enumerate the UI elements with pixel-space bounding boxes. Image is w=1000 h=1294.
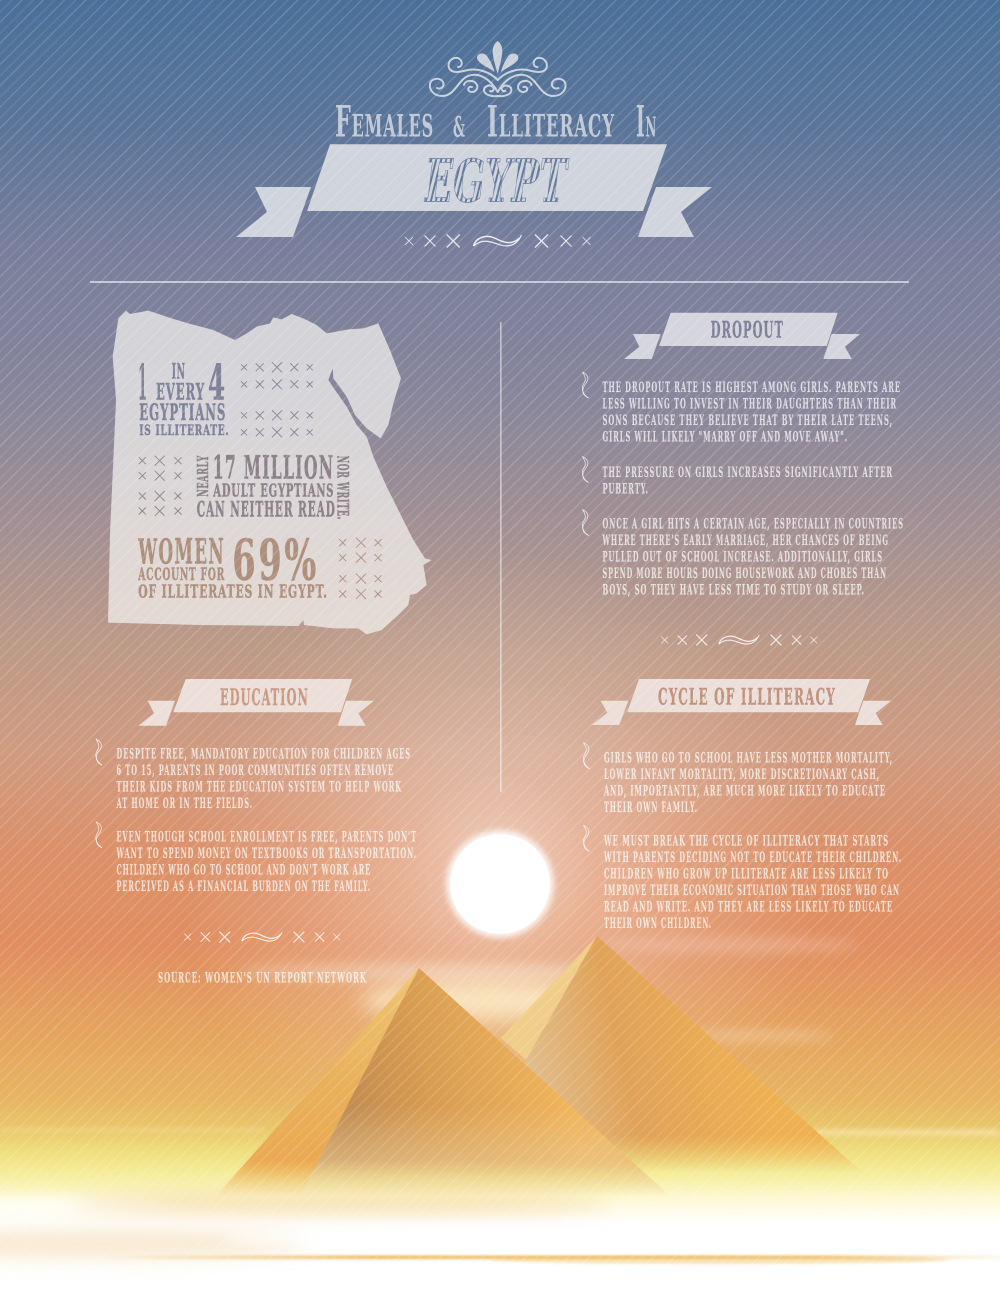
text: education body: CHILDREN WHO GO TO SCHOOL AND DON'T WORK ARE (116, 862, 371, 878)
infographic canvas: EVEN THOUGH SCHOOL ENROLLMENT IS FREE, PARENTS DON'T (116, 830, 417, 846)
header ornament (430, 41, 566, 96)
stat: nearly 17 million (194, 448, 352, 522)
foreground sand and mist (0, 1191, 1000, 1264)
text: dropout body (602, 380, 904, 598)
bullet icons (582, 372, 588, 536)
ribbon: Dropout (624, 313, 860, 359)
panel: Cycle of illiteracy (583, 679, 902, 932)
stat: nearly 17 million: NEARLY (194, 455, 212, 497)
title: Females & Illiteracy In: FEMALES (335, 98, 434, 148)
map of Egypt (108, 311, 432, 634)
stat: 1 in every 4: EGYPTIANS (139, 400, 226, 426)
panel: Education (96, 679, 417, 986)
haze clouds behind pyramids (0, 937, 1000, 1136)
text: education body: PERCEIVED AS A FINANCIAL BURDEN ON THE FAMILY. (116, 879, 371, 895)
bullet icons (96, 739, 102, 848)
decorative cross grids (139, 362, 382, 599)
ribbon: Cycle of illiteracy: CYCLE OF ILLITERACY (658, 684, 836, 710)
horizontal rule (90, 281, 909, 283)
title: Females & Illiteracy In (335, 98, 657, 148)
stat: 1 in every 4: IN (172, 358, 186, 383)
stat: 1 in every 4: 4 (208, 353, 227, 411)
panel: Egypt map statistics (108, 311, 432, 634)
title ribbon: Egypt: EGYPT (424, 146, 570, 216)
title: Females & Illiteracy In: & (453, 110, 465, 144)
stat: nearly 17 million: ADULT EGYPTIANS (213, 481, 334, 502)
text: education body: AT HOME OR IN THE FIELDS. (116, 796, 253, 812)
stat: nearly 17 million: CAN NEITHER READ (197, 497, 336, 522)
infographic canvas: WANT TO SPEND MONEY ON TEXTBOOKS OR TRANSPORTATION. (116, 846, 417, 862)
divider: dropout (661, 635, 817, 645)
panel: Dropout (582, 313, 904, 645)
stat: women 69%: WOMEN (138, 531, 225, 572)
ribbon: Cycle of illiteracy (592, 679, 891, 725)
vertical rule (500, 322, 502, 792)
ribbon: Dropout: DROPOUT (711, 318, 784, 344)
source note: SOURCE: WOMEN'S UN REPORT NETWORK (158, 970, 367, 986)
stat: women 69%: ACCOUNT FOR (138, 564, 225, 584)
divider: education (184, 932, 340, 942)
divider: title (405, 234, 590, 248)
stat: nearly 17 million: NOR WRITE. (334, 456, 352, 520)
stat: 1 in every 4: IS ILLITERATE. (139, 423, 229, 439)
title: Females & Illiteracy In: ILLITERACY (487, 98, 615, 148)
text: dropout body: PUBERTY. (602, 482, 649, 498)
text: education body: THEIR KIDS FROM THE EDUCATION SYSTEM TO HELP WORK (116, 780, 402, 796)
stat: 1 in every 4: 1 (138, 353, 148, 411)
stat: nearly 17 million: 17 MILLION (213, 448, 334, 486)
text: education body: 6 TO 15, PARENTS IN POOR COMMUNITIES OFTEN REMOVE (116, 763, 394, 779)
text: education body (116, 746, 417, 895)
text: cycle body: THEIR OWN CHILDREN. (604, 916, 712, 932)
stat: 1 in every 4 (138, 353, 229, 439)
title: Females & Illiteracy In: IN (636, 98, 657, 148)
bullet icons (583, 743, 590, 851)
stat: women 69% (138, 527, 328, 603)
pyramid: back (480, 936, 862, 1172)
text: cycle body: THEIR OWN FAMILY. (604, 800, 698, 816)
sun (180, 550, 820, 1190)
stat: women 69%: OF ILLITERATES IN EGYPT. (138, 582, 328, 603)
pyramid: front (216, 968, 670, 1196)
text: cycle body (604, 750, 902, 932)
ribbon: Education (138, 679, 374, 726)
stat: 1 in every 4: EVERY (156, 379, 205, 405)
title ribbon: Egypt (236, 144, 712, 237)
ribbon: Education: EDUCATION (220, 685, 309, 711)
infographic canvas: DESPITE FREE, MANDATORY EDUCATION FOR CHILDREN AGES (116, 746, 411, 762)
stat: women 69%: 69% (232, 527, 319, 593)
